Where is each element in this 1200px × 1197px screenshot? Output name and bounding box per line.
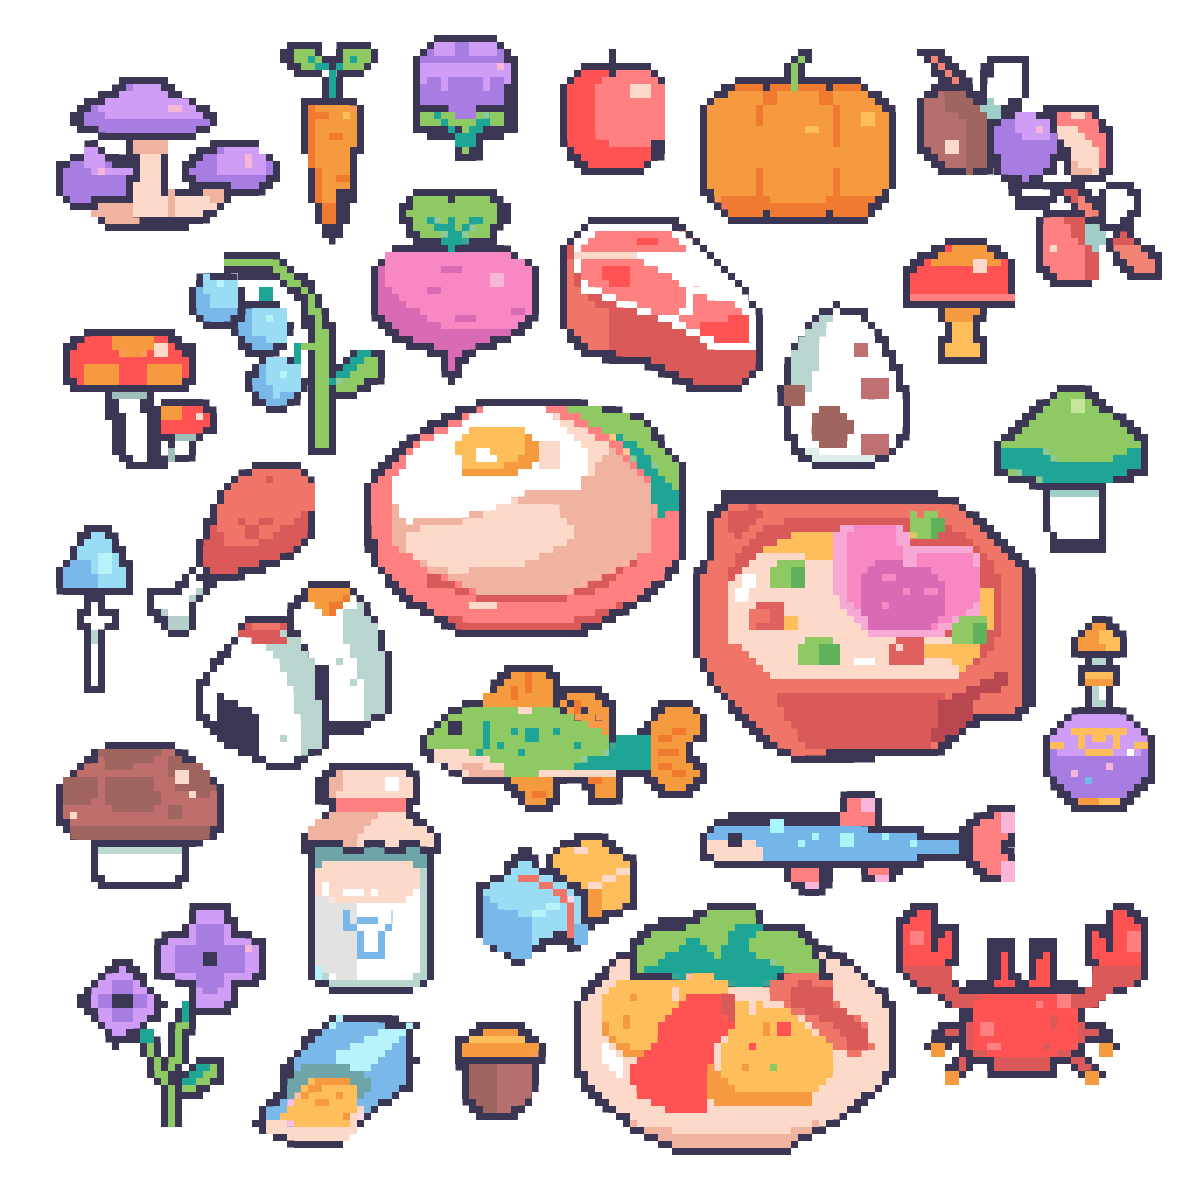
icon: pink turnip — [377, 191, 533, 378]
icon: berries and sticks — [922, 54, 1161, 284]
icon: red crab — [900, 906, 1146, 1083]
icon: orange pumpkin — [702, 50, 891, 222]
icon: rice balls — [201, 584, 388, 764]
icon: purple mushroom cluster — [61, 82, 278, 224]
icon: purple potion bottle — [1046, 621, 1153, 809]
icon: milk bottle — [303, 767, 438, 991]
icon: blue bag of chips — [258, 1017, 414, 1144]
icon: blue berry plant — [192, 255, 379, 452]
icon: speckled egg — [784, 307, 906, 466]
icon: small red mushroom with yellow stem — [909, 243, 1014, 360]
icon: green mushroom — [996, 389, 1146, 546]
icon: stew in clay pot with heart — [696, 497, 1029, 757]
icon: brown mushroom — [62, 746, 218, 886]
icon: red mushroom pair — [68, 330, 213, 464]
icon: red apple — [564, 48, 664, 173]
icon: small blue mushroom — [61, 527, 132, 692]
icon: carrot — [287, 46, 373, 238]
icon: purple flowers — [84, 906, 264, 1128]
icon: raw steak — [564, 220, 759, 386]
icon: wrapped butter block — [477, 834, 636, 962]
icon: purple flower bud — [419, 37, 511, 159]
icon: acorn — [456, 1028, 541, 1115]
icon: blue slender fish — [702, 797, 1014, 889]
icon: fried egg rice bowl — [368, 403, 680, 634]
icon: green perch fish — [426, 666, 701, 806]
icon: chicken drumstick — [149, 469, 314, 633]
icon: omelette plate with greens — [580, 909, 890, 1150]
